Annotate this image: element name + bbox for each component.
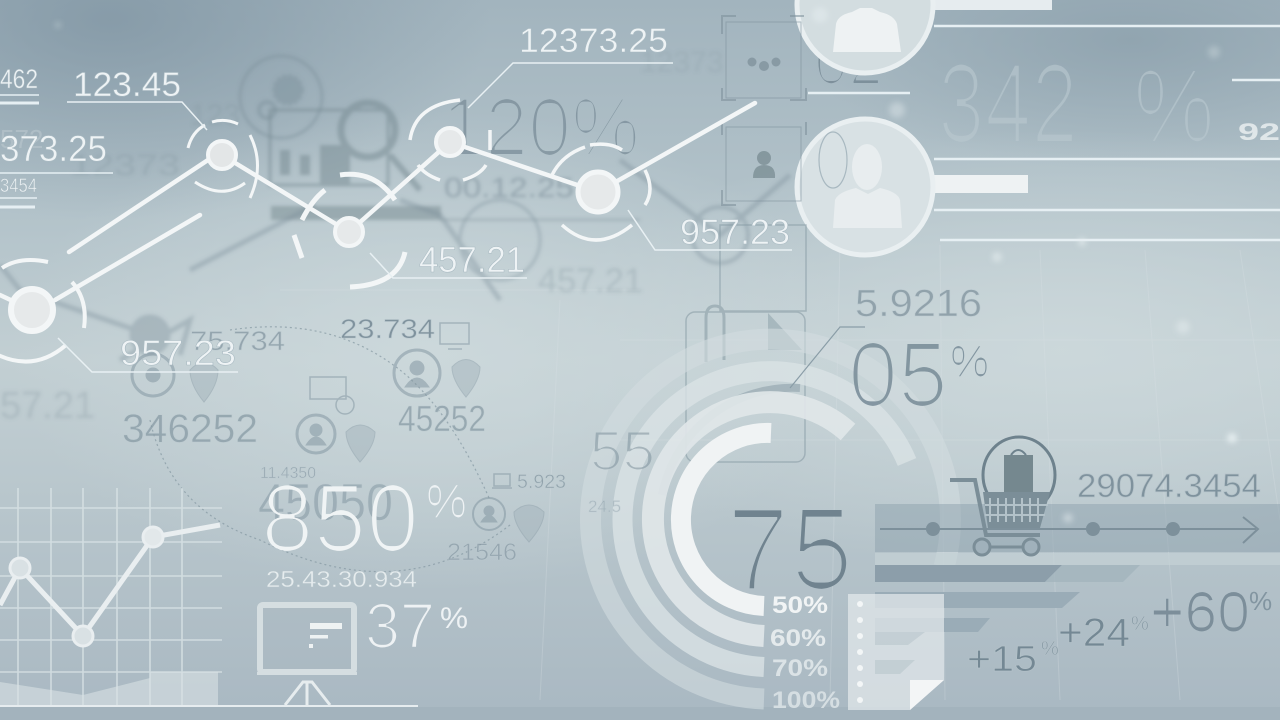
ring 60% — [653, 402, 848, 636]
node 5 — [578, 172, 618, 212]
callout: 12373.25 — [468, 22, 673, 108]
number 11.4350: 11.4350 — [260, 465, 316, 482]
icon: small monitor — [440, 323, 469, 349]
bottom darker strip — [0, 707, 1280, 720]
icon: pin 2 — [452, 360, 480, 397]
icon: avatar 4 — [473, 498, 505, 530]
icon: monitor with clock — [310, 377, 354, 414]
ring label 50%: 50% — [772, 592, 828, 619]
number 21546: 21546 — [447, 539, 517, 566]
panel: dotted world network — [122, 314, 566, 572]
number 572 ghost: 572 — [0, 124, 43, 154]
perspective floor grid — [280, 245, 1280, 700]
number 5.9216 with leader: 5.9216 — [855, 283, 982, 325]
number 45252: 45252 — [398, 398, 486, 439]
rings around node 2 — [188, 120, 258, 198]
number 55: 55 — [590, 419, 655, 482]
rings around node 3 — [294, 174, 405, 287]
icon: clipboard document outline — [686, 225, 806, 462]
number 75: 75 — [726, 484, 854, 614]
ghost number: 02: 02 — [814, 29, 883, 98]
icon: pin 3 — [346, 425, 375, 462]
ring 100% — [590, 339, 950, 699]
third slanted bar — [875, 618, 990, 632]
number 373.25: 373.25 — [0, 128, 107, 169]
percent +24: % — [1131, 613, 1149, 635]
panel: radial progress rings — [590, 339, 950, 699]
line chart: main white trend — [0, 100, 755, 362]
percent for 05: % — [950, 337, 989, 386]
icon: framed team — [722, 16, 806, 100]
number +24: +24 — [1058, 611, 1130, 655]
number 462: 462 — [0, 64, 38, 94]
node 4 — [436, 128, 464, 156]
bar under avatar — [930, 175, 1028, 193]
ring 50% — [681, 433, 771, 606]
callout: 957.23 left — [58, 334, 238, 373]
node 2 — [208, 141, 236, 169]
baseline rule — [0, 705, 418, 707]
callout: 123.45: 123.45 — [73, 66, 181, 104]
icon: lower avatar circle — [797, 119, 933, 255]
stat 25.43.30.934: 25.43.30.934 — [266, 566, 417, 592]
icon: avatar 2 — [394, 350, 440, 396]
panel: grid line chart bottom-left — [0, 488, 222, 706]
percent +60: % — [1249, 586, 1272, 616]
number 5.9216 with leader — [790, 283, 982, 388]
stat 37: 37 — [365, 590, 435, 662]
percent +15: % — [1041, 638, 1059, 660]
icon: avatar 3 — [297, 415, 335, 453]
icon: presentation board on tripod — [257, 605, 357, 705]
rule lines — [0, 95, 113, 198]
chart area — [0, 672, 218, 706]
chart grid — [0, 488, 222, 705]
mid slanted bar — [1045, 565, 1140, 582]
top short bar — [930, 0, 1052, 10]
rings around node 5 — [552, 144, 650, 240]
ghost number: 00.12.25: 00.12.25 — [444, 172, 574, 203]
ghost number: 457.21 right: 457.21 — [538, 262, 643, 300]
ghost number: 57.21 left: 57.21 — [0, 385, 95, 427]
big stat: 850: 850 — [261, 465, 419, 572]
callout: 957.23 left: 957.23 — [120, 334, 236, 373]
chart line with nodes — [0, 525, 220, 646]
dotted network ellipse — [150, 327, 510, 572]
rings around node 1 — [0, 260, 85, 362]
second slanted bar — [875, 592, 1080, 608]
trend segments — [0, 103, 755, 310]
pins and avatars — [132, 323, 544, 542]
icon: framed person — [722, 122, 806, 205]
callout: 457.21 — [370, 239, 527, 280]
big number 342: 342 — [938, 41, 1078, 166]
number 75.734: 75.734 — [190, 326, 285, 356]
ghost number: 123: 123 — [190, 99, 240, 132]
callout: 12373.25: 12373.25 — [519, 22, 668, 60]
timeline band — [875, 504, 1280, 552]
number 45050 ghost: 45050 — [258, 474, 393, 532]
panel: timeline and stacked bars — [875, 437, 1280, 679]
number 346252: 346252 — [122, 407, 258, 451]
ring label 100%: 100% — [772, 687, 840, 714]
ghost line chart — [0, 160, 790, 360]
number 29074.3454: 29074.3454 — [1077, 467, 1261, 504]
number +60: +60 — [1150, 580, 1250, 643]
small label 92: 92 — [1238, 119, 1280, 146]
ghost number: 12373: 12373 — [70, 149, 180, 182]
node 1 — [11, 289, 53, 331]
ghost number: 12373 top: 12373 — [640, 46, 723, 79]
icon: top avatar circle — [797, 0, 933, 73]
number 05: 05 — [848, 324, 948, 426]
callout: 957.23 right — [628, 210, 792, 252]
number 3454: 3454 — [0, 176, 37, 197]
ring label 70%: 70% — [772, 655, 828, 682]
icon: gears in circle — [240, 56, 322, 138]
sparkles — [55, 7, 1237, 523]
icon: magnifier and browser panel — [270, 103, 420, 190]
rule lines — [808, 26, 1280, 240]
node 3 — [335, 218, 363, 246]
icon: laptop — [492, 474, 512, 488]
pale band — [875, 553, 1280, 565]
ghost rule — [440, 219, 640, 220]
big stat percent: % — [426, 475, 467, 527]
rings around node 4 — [410, 100, 490, 180]
icon: pin 4 — [514, 505, 544, 542]
callout: 957.23 right: 957.23 — [680, 213, 790, 252]
icon: pin 1 — [190, 362, 218, 402]
thick rule lines — [0, 103, 39, 207]
callout: 457.21: 457.21 — [419, 239, 525, 280]
ghost bar — [271, 206, 441, 220]
ring label 60%: 60% — [770, 625, 826, 652]
icon: shopping cart with bag — [950, 437, 1055, 555]
dark slanted bar — [875, 565, 1062, 582]
icon: avatar 1 — [132, 354, 174, 396]
ring 70% — [622, 371, 907, 667]
icon: document with folded corner — [848, 594, 944, 710]
big percent sign: % — [1133, 49, 1215, 165]
callout: 123.45 — [67, 66, 207, 130]
panel: left stat labels — [0, 64, 113, 207]
number 24.5: 24.5 — [588, 497, 621, 516]
number 23.734: 23.734 — [340, 314, 435, 344]
dark accent ring — [662, 388, 800, 495]
stat 37 percent: % — [440, 602, 468, 635]
timeline line with nodes and arrow — [880, 517, 1258, 543]
number 5.923: 5.923 — [517, 472, 566, 493]
panel: top-right people list — [722, 0, 1280, 255]
number +15: +15 — [967, 638, 1037, 679]
ghost layer: blurred background dashboard — [0, 46, 790, 427]
ghost number: 120%: 120% — [442, 82, 640, 173]
